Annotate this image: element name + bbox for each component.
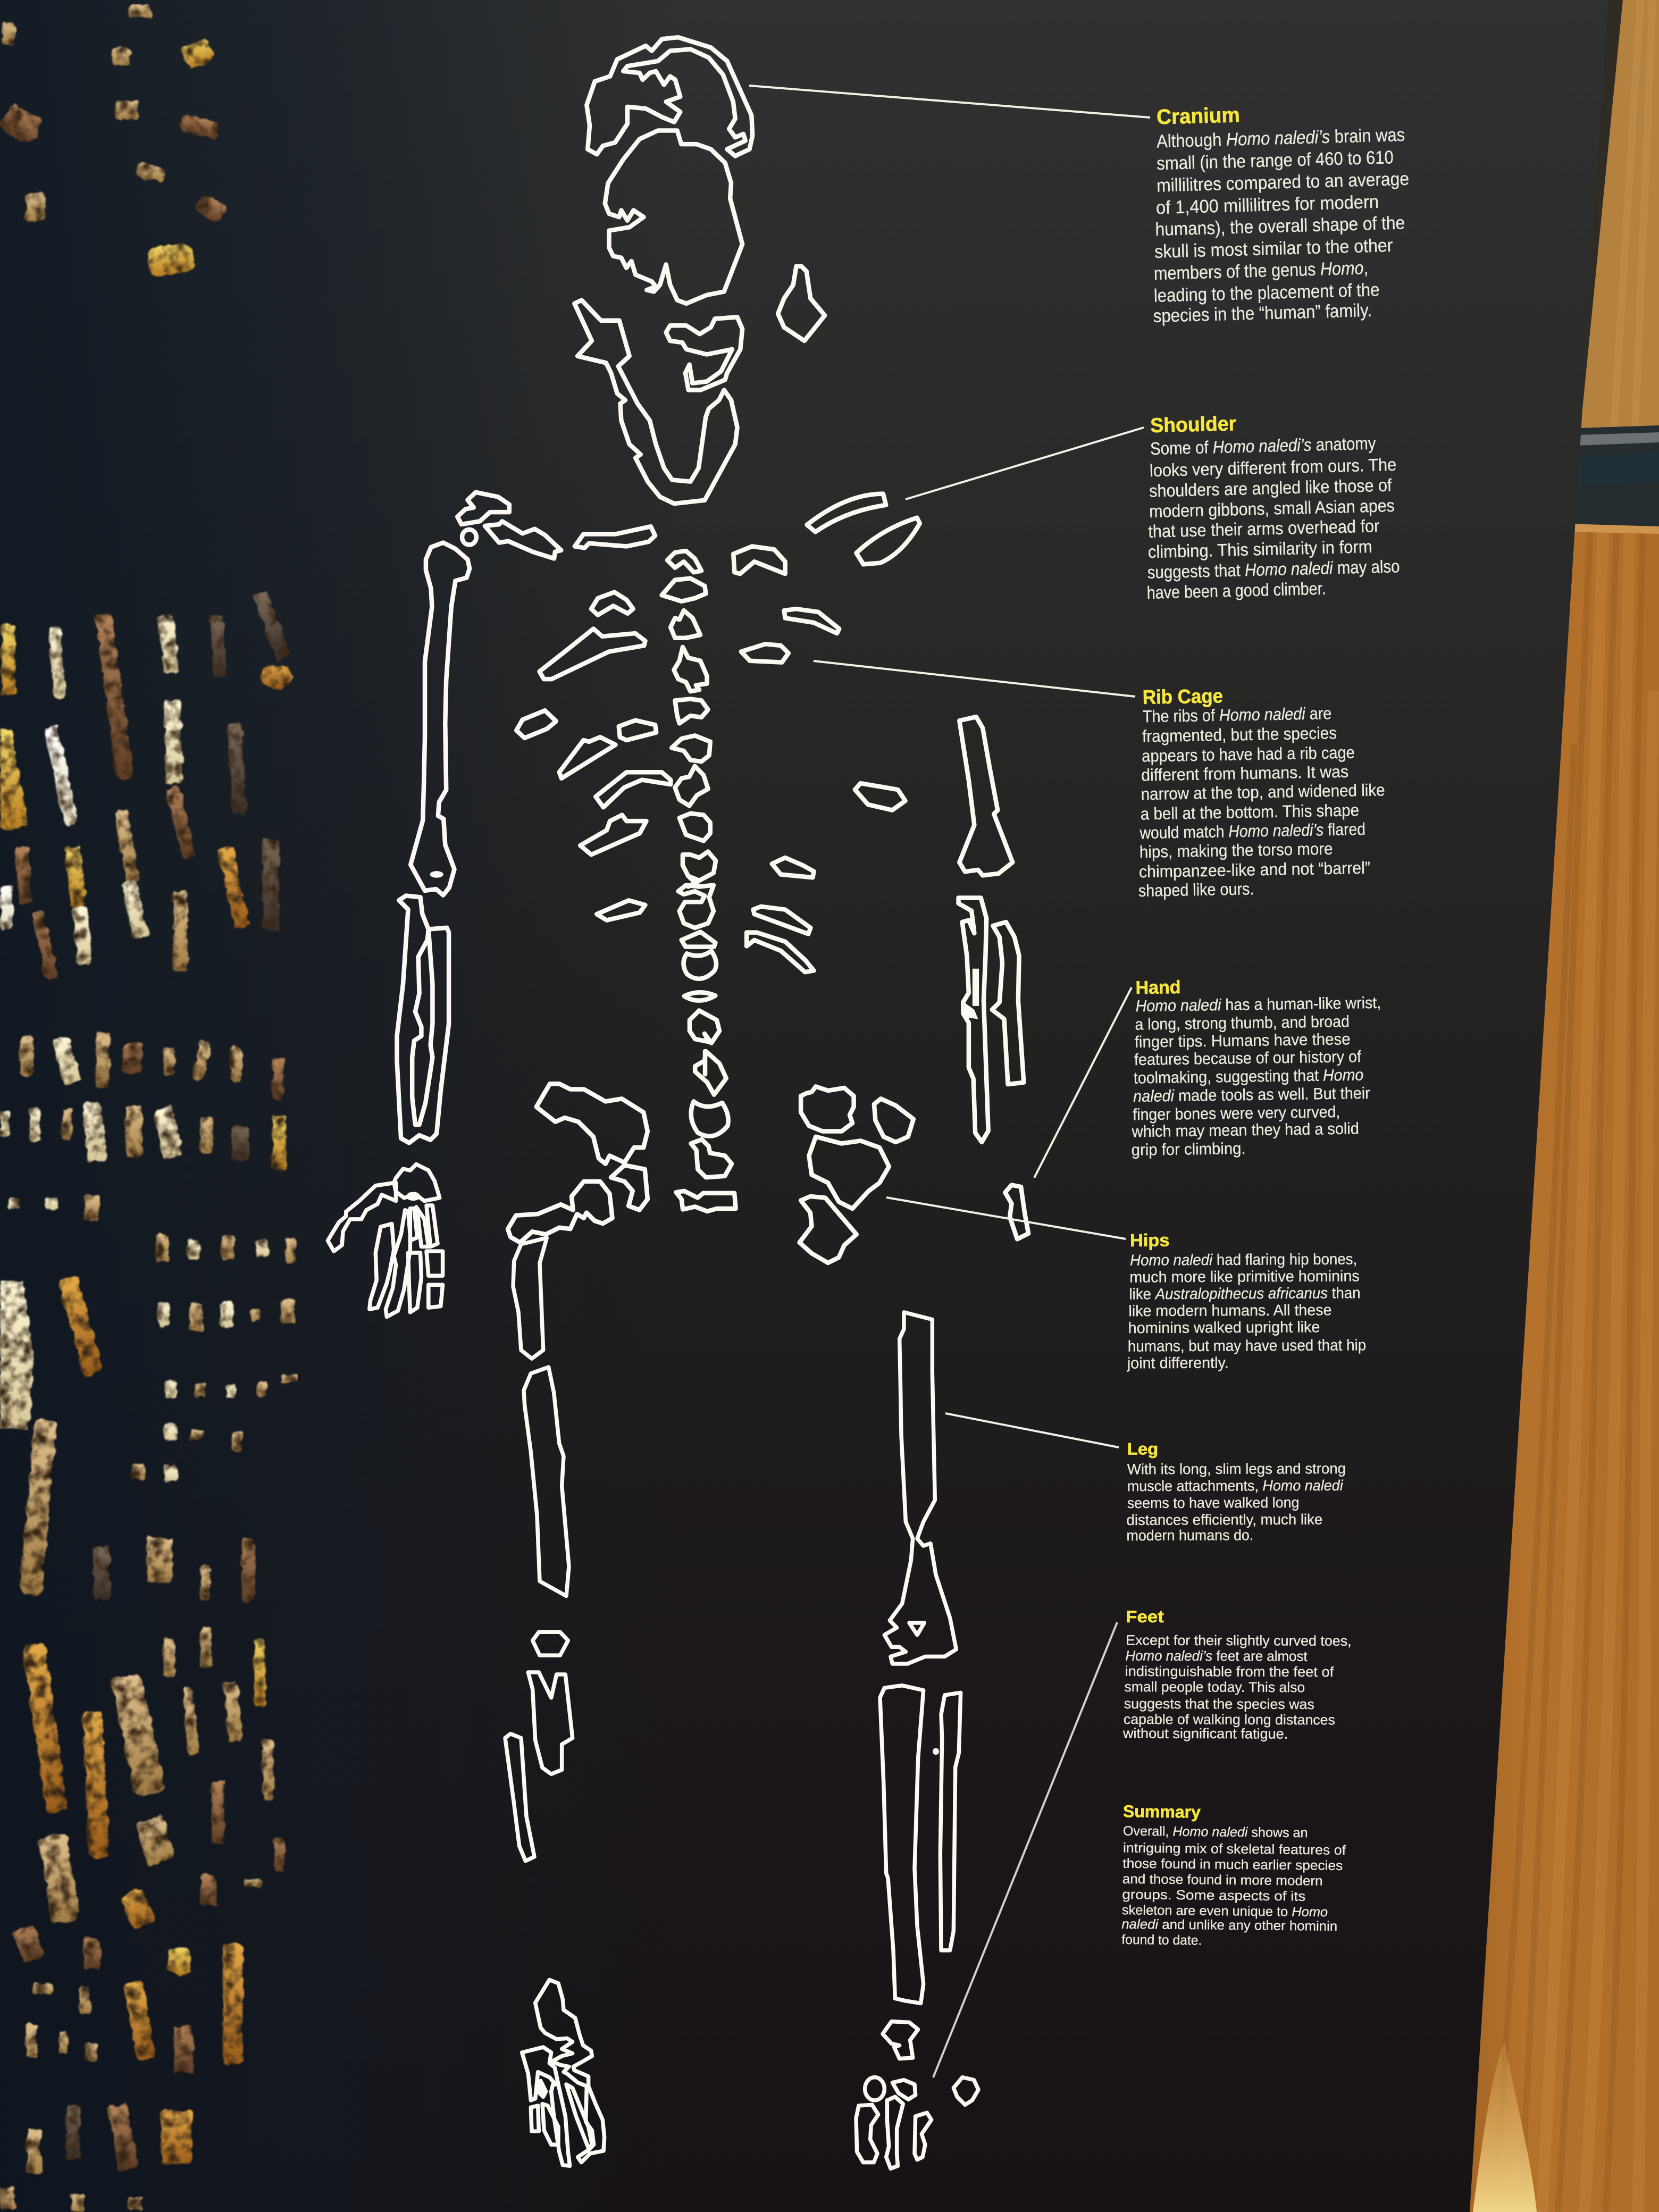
leg body: seems to have walked long: [1127, 1494, 1300, 1511]
rib cage body: hips, making the torso more: [1139, 839, 1333, 861]
lower spine and pelvis: [508, 932, 914, 1263]
summary heading: Summary: [1123, 1802, 1201, 1822]
cranium body: skull is most similar to the other: [1154, 236, 1393, 262]
rib cage body: chimpanzee-like and not “barrel”: [1139, 858, 1370, 881]
cranium heading: Cranium: [1157, 103, 1240, 129]
hand body: grip for climbing.: [1131, 1139, 1246, 1159]
shoulder body: modern gibbons, small Asian apes: [1149, 496, 1395, 522]
shadow strip behind panel edge: [1574, 0, 1623, 431]
rib cage body: shaped like ours.: [1138, 879, 1254, 900]
feet body: [1122, 1632, 1352, 1742]
right leg: [880, 1312, 961, 2003]
rib cage body: [1138, 703, 1385, 900]
hand body: naledi made tools as well. But their: [1133, 1084, 1370, 1105]
feet body: suggests that the species was: [1124, 1696, 1314, 1712]
left hand: [328, 1164, 443, 1317]
hips body: joint differently.: [1127, 1355, 1229, 1372]
hand body: which may mean they had a solid: [1132, 1119, 1359, 1141]
shoulder body: [1146, 434, 1400, 603]
cranium body: leading to the placement of the: [1153, 280, 1380, 306]
cranium body: Although Homo naledi’s brain was: [1157, 125, 1405, 152]
cranium body: of 1,400 millilitres for modern: [1155, 192, 1379, 218]
cranium body: species in the “human” family.: [1153, 300, 1372, 326]
feet body: without significant fatigue.: [1122, 1725, 1288, 1742]
fossil bones photographs: [0, 4, 298, 2212]
rib cage body: different from humans. It was: [1141, 762, 1348, 784]
summary body: and those found in more modern: [1122, 1872, 1323, 1889]
leg body: [1126, 1460, 1346, 1544]
feet body: small people today. This also: [1124, 1679, 1305, 1695]
rib cage body: a bell at the bottom. This shape: [1141, 800, 1359, 823]
summary body: intriguing mix of skeletal features of: [1123, 1841, 1346, 1858]
shoulder body: looks very different from ours. The: [1150, 455, 1397, 481]
shoulder heading: Shoulder: [1150, 412, 1237, 437]
cranium body: humans), the overall shape of the: [1155, 213, 1405, 240]
hand body: a long, strong thumb, and broad: [1135, 1012, 1350, 1034]
hips body: much more like primitive hominins: [1129, 1268, 1360, 1286]
cranium body: members of the genus Homo,: [1153, 258, 1369, 284]
hand heading: Hand: [1135, 977, 1181, 998]
right foot: [856, 2022, 978, 2168]
skull: cranium, vault, mandible, maxilla: [574, 37, 825, 504]
leader line: rib cage: [814, 661, 1135, 697]
leg body: distances efficiently, much like: [1126, 1511, 1322, 1528]
leader line: feet: [933, 1622, 1117, 2077]
hips body: Homo naledi had flaring hip bones,: [1130, 1251, 1357, 1269]
hand body: features because of our history of: [1134, 1048, 1362, 1069]
wood wall: [1436, 0, 1659, 2212]
hand body: toolmaking, suggesting that Homo: [1134, 1066, 1364, 1087]
annotation texts: [1121, 103, 1409, 1948]
cranium body: small (in the range of 460 to 610: [1157, 147, 1394, 174]
rib cage body: would match Homo naledi’s flared: [1139, 819, 1365, 842]
shoulder body: Some of Homo naledi’s anatomy: [1150, 434, 1376, 459]
cranium body: [1153, 125, 1409, 326]
hips body: like modern humans. All these: [1128, 1302, 1332, 1320]
left foot: [522, 1980, 605, 2166]
summary body: [1121, 1824, 1346, 1948]
left shoulder and humerus: [410, 492, 561, 895]
feet heading: Feet: [1126, 1607, 1164, 1626]
spine and ribs upper: [540, 526, 839, 972]
leader line: hips: [886, 1197, 1126, 1239]
cranium body: millilitres compared to an average: [1157, 169, 1409, 196]
leader line: hand: [1034, 987, 1132, 1178]
hand body: Homo naledi has a human-like wrist,: [1135, 994, 1381, 1015]
right arm and isolated rib: [855, 717, 1028, 1239]
skeleton outline: [328, 37, 1028, 2168]
rib cage annotation: [1138, 684, 1385, 900]
shoulder body: climbing. This similarity in form: [1147, 537, 1372, 562]
right clavicle and scapula: [807, 494, 920, 564]
rib cage body: The ribs of Homo naledi are: [1143, 703, 1332, 726]
summary body: Overall, Homo naledi shows an: [1123, 1824, 1308, 1840]
rib cage heading: Rib Cage: [1142, 684, 1223, 708]
rib cage body: appears to have had a rib cage: [1142, 743, 1355, 766]
hand body: [1131, 994, 1381, 1159]
shoulder body: that use their arms overhead for: [1148, 516, 1380, 542]
hips body: hominins walked upright like: [1128, 1319, 1320, 1337]
summary body: those found in much earlier species: [1122, 1856, 1343, 1873]
shoulder body: have been a good climber.: [1146, 579, 1326, 603]
shoulder body: shoulders are angled like those of: [1149, 476, 1393, 501]
left leg: [505, 1238, 573, 1861]
summary body: groups. Some aspects of its: [1122, 1887, 1305, 1904]
summary body: naledi and unlike any other hominin: [1121, 1917, 1337, 1934]
hips body: humans, but may have used that hip: [1128, 1337, 1366, 1355]
leg body: muscle attachments, Homo naledi: [1127, 1477, 1344, 1494]
leg body: With its long, slim legs and strong: [1127, 1460, 1346, 1477]
summary body: skeleton are even unique to Homo: [1122, 1903, 1328, 1920]
hips body: like Australopithecus africanus than: [1129, 1285, 1361, 1303]
shoulder annotation: [1146, 412, 1400, 603]
metal wall bracket: [1564, 425, 1659, 534]
shoulder body: suggests that Homo naledi may also: [1147, 557, 1400, 583]
leg body: modern humans do.: [1126, 1527, 1253, 1544]
leader line: leg: [945, 1413, 1119, 1447]
left forearm: [397, 895, 449, 1143]
hips body: [1127, 1251, 1366, 1372]
hand annotation: [1131, 977, 1381, 1159]
leg heading: Leg: [1127, 1439, 1158, 1458]
leader line: cranium: [749, 86, 1150, 118]
leg annotation: [1126, 1439, 1346, 1544]
hips annotation: [1127, 1231, 1366, 1372]
hips heading: Hips: [1130, 1231, 1169, 1251]
feet annotation: [1122, 1607, 1352, 1742]
feet body: Homo naledi’s feet are almost: [1125, 1648, 1308, 1664]
leader line: shoulder: [906, 428, 1144, 499]
hand body: finger tips. Humans have these: [1135, 1030, 1351, 1051]
feet body: capable of walking long distances: [1124, 1711, 1335, 1728]
summary body: found to date.: [1121, 1932, 1202, 1948]
hand body: finger bones were very curved,: [1133, 1103, 1340, 1124]
feet body: Except for their slightly curved toes,: [1126, 1632, 1352, 1649]
cranium annotation: [1153, 103, 1409, 326]
feet body: indistinguishable from the feet of: [1125, 1663, 1334, 1680]
rib cage body: narrow at the top, and widened like: [1141, 780, 1385, 803]
rib cage body: fragmented, but the species: [1142, 723, 1337, 746]
summary annotation: [1121, 1802, 1346, 1948]
